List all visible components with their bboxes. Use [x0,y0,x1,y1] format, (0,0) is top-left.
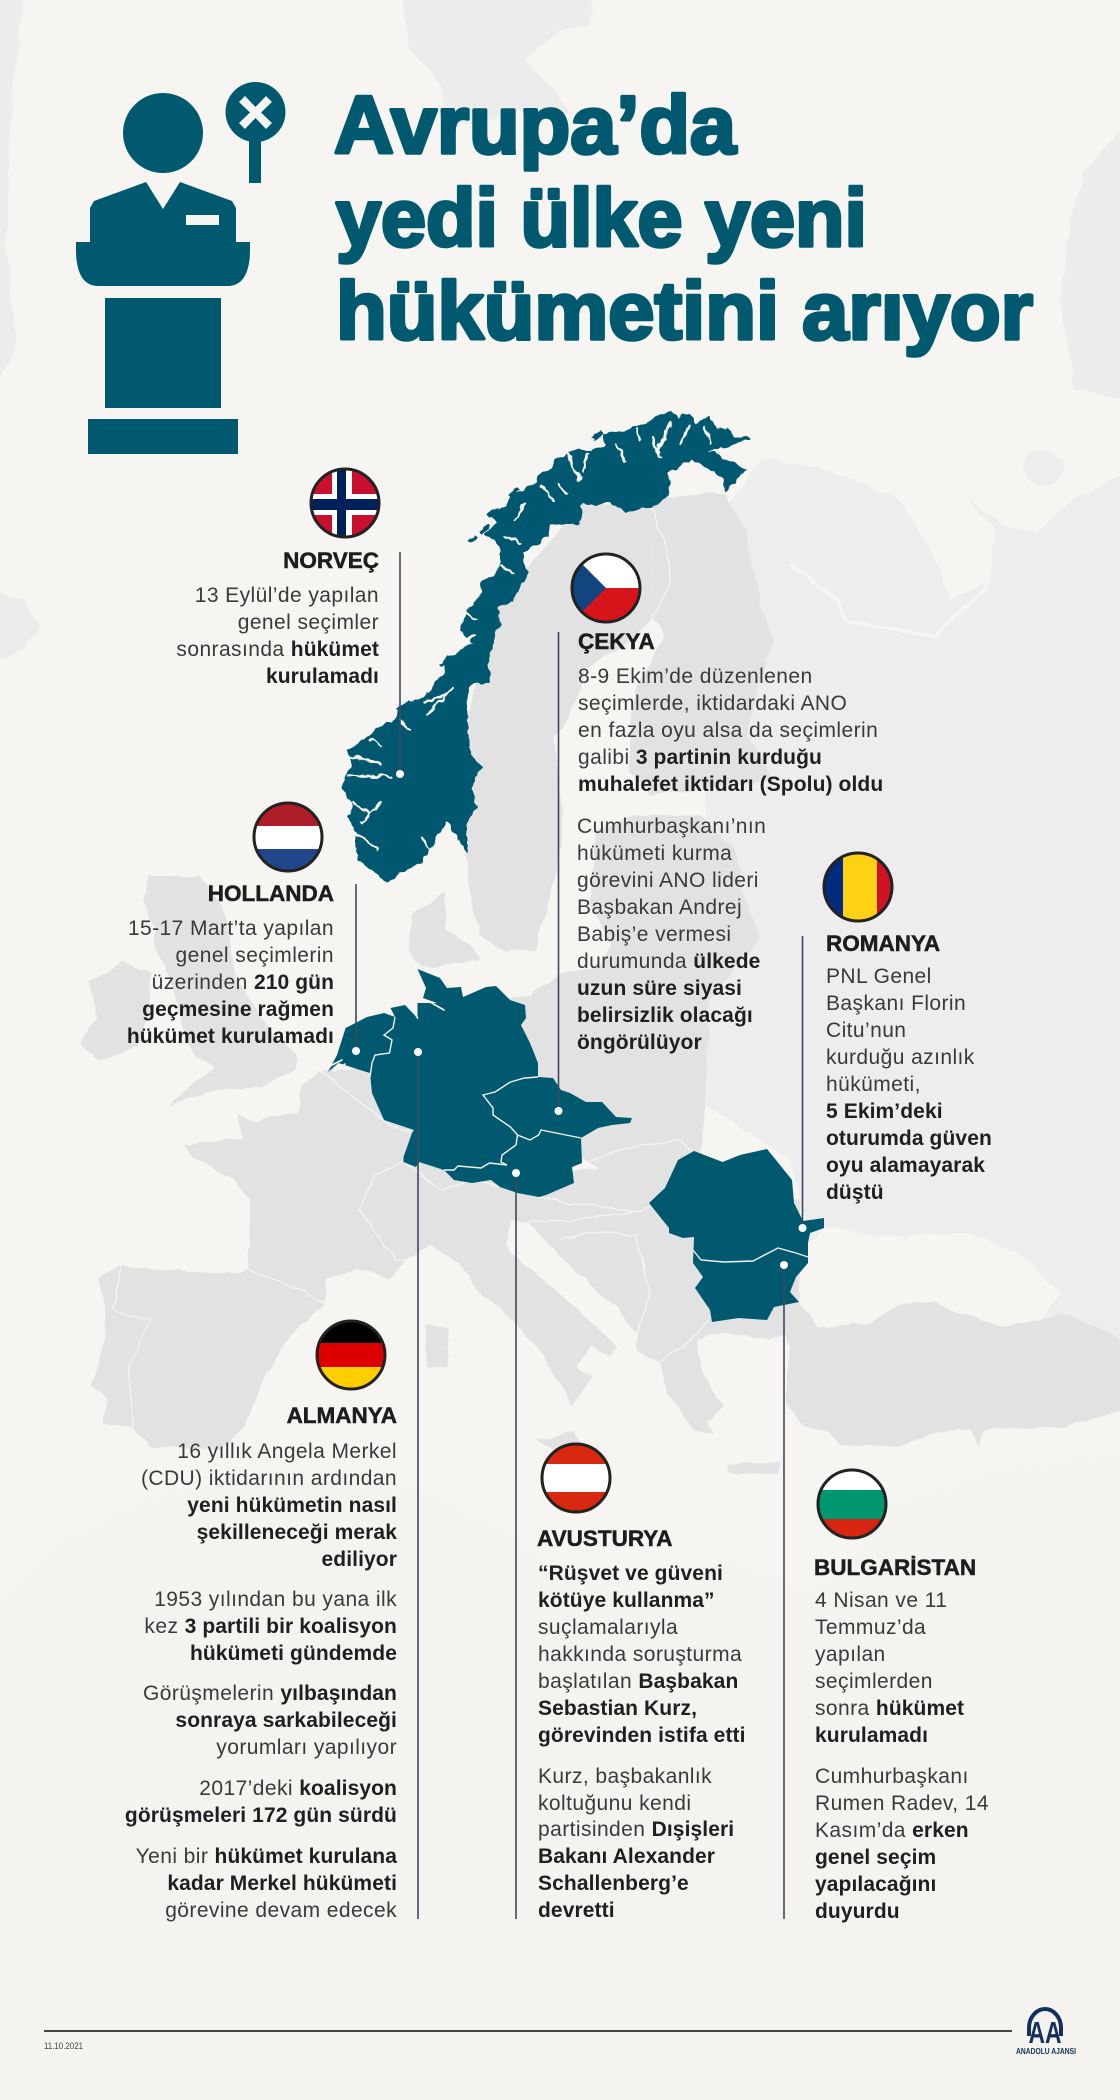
text: düştü [826,1181,884,1204]
text: oturumda güven [826,1127,992,1150]
text: belirsizlik olacağı [577,1004,753,1027]
text: 5 Ekim’deki [826,1100,943,1123]
heading: HOLLANDA [208,881,334,906]
text: yeni hükümetin nasıl [187,1494,397,1517]
text: seçimlerde, iktidardaki ANO [578,692,847,715]
panel: Netherlands [127,803,334,1048]
logo: Anadolu Ajansı: AA [1028,2015,1062,2050]
Arctic island [1023,450,1063,486]
text: Sebastian Kurz, [538,1697,697,1720]
text: hakkında soruşturma [538,1643,742,1666]
panel: Austria [536,1440,746,1922]
text: 1953 yılından bu yana ilk [154,1588,397,1611]
panel: Romania [820,850,992,1204]
text: koltuğunu kendi [538,1792,691,1815]
panel: Czechia [566,548,883,1054]
title: Avrupa’da [334,80,737,171]
torso and lectern top [76,182,250,286]
date: 11.10.2021 [44,2041,83,2051]
text: ediliyor [322,1548,397,1571]
Norway fjords [350,423,712,855]
text: “Rüşvet ve güveni [538,1562,723,1585]
text: kötüye kullanma” [538,1589,715,1612]
pedestal [105,298,221,408]
Czechia leader [554,632,562,1115]
text: sonraya sarkabileceği [175,1709,397,1732]
text: Rumen Radev, 14 [815,1792,989,1815]
flag: Bulgaria [816,1468,888,1540]
text: kez 3 partili bir koalisyon [144,1615,397,1638]
title [334,80,1033,357]
text: Kasım’da erken [815,1819,969,1842]
text: suçlamalarıyla [538,1616,678,1639]
Netherlands leader [352,884,360,1055]
text: 4 Nisan ve 11 [815,1589,947,1612]
flag: Romania [822,852,894,922]
text: kurulamadı [266,665,379,688]
panel: Germany [125,1320,397,1922]
text: öngörülüyor [577,1031,702,1054]
heading: BULGARİSTAN [814,1555,976,1580]
Crimea [880,1190,960,1238]
Black Sea [803,1227,1060,1327]
heading: ALMANYA [287,1403,397,1428]
Finland [630,493,774,795]
Ireland [80,961,150,1061]
text: hükümet kurulamadı [127,1025,334,1048]
panel: Bulgaria [812,1466,989,1923]
Bulgaria leader [780,1261,788,1919]
head [123,93,203,173]
text: başlatılan Başbakan [538,1670,738,1693]
heading: ÇEKYA [578,629,655,654]
text: Citu’nun [826,1019,906,1042]
map: highlighted countries [328,411,824,1322]
heading: ROMANYA [826,931,940,956]
text: sonra hükümet [815,1697,964,1720]
text: görüşmeleri 172 gün sürdü [125,1804,397,1827]
Great Britain [143,876,296,1106]
text: kurulamadı [815,1724,928,1747]
text: Temmuz’da [815,1616,926,1639]
faint Africa and Middle East landmass [0,1450,1120,2100]
Baltics, Poland and central Europe [500,815,760,1180]
Mediterranean islands [425,1187,780,1476]
Turkey [785,1302,1120,1448]
title: yedi ülke yeni [336,173,867,264]
text: genel seçim [815,1846,936,1869]
text: 13 Eylül’de yapılan [195,584,379,607]
Germany leader [414,1048,422,1919]
panel: Norway [176,465,385,688]
text: Görüşmelerin yılbaşından [143,1682,397,1705]
logo: Anadolu Ajansı: ANADOLU AJANSI [1016,2047,1076,2056]
text: (CDU) iktidarının ardından [141,1467,397,1490]
text: görevinden istifa etti [538,1724,746,1747]
base [88,419,238,454]
text: 15-17 Mart’ta yapılan [128,917,334,940]
text: hükümeti gündemde [190,1642,397,1665]
Austria leader [512,1169,520,1919]
text: 8-9 Ekim’de düzenlenen [578,665,813,688]
text: durumunda ülkede [577,950,760,973]
logo: Anadolu Ajansı [1016,2009,1076,2056]
flag: Austria [540,1442,612,1514]
Romania leader [798,936,806,1232]
White Sea [789,491,992,636]
flag: Netherlands [248,803,328,872]
text: Cumhurbaşkanı [815,1765,969,1788]
text: görevine devam edecek [165,1899,397,1922]
text: devretti [538,1899,615,1922]
text: şekilleneceği merak [197,1521,397,1544]
flag: Germany [316,1320,386,1390]
text: 2017’deki koalisyon [199,1777,397,1800]
text: seçimlerden [815,1670,933,1693]
Sweden [462,503,653,950]
Netherlands, Germany, Czechia, Austria [328,969,632,1197]
Iceland [0,590,40,662]
text: Schallenberg’e [538,1872,689,1895]
text: üzerinden 210 gün [152,971,334,994]
Norway leader [396,552,404,778]
text: yapılan [815,1643,886,1666]
text: 16 yıllık Angela Merkel [177,1440,397,1463]
Denmark [410,891,480,968]
text: yorumları yapılıyor [216,1736,397,1759]
text: muhalefet iktidarı (Spolu) oldu [578,773,883,796]
heading: NORVEÇ [283,548,379,573]
France, Iberia, Italy [91,1060,617,1450]
flag: Norway [310,468,380,538]
text: duyurdu [815,1900,900,1923]
text: Başkanı Florin [826,992,966,1015]
text: Cumhurbaşkanı’nın [577,815,766,838]
text: hükümeti kurma [577,842,732,865]
text: uzun süre siyasi [577,977,742,1000]
Balkans [528,1170,819,1433]
text: genel seçimlerin [176,944,334,967]
text: kurduğu azınlık [826,1046,975,1069]
text: görevini ANO lideri [577,869,759,892]
text: oyu alamayarak [826,1154,985,1177]
text: en fazla oyu alsa da seçimlerin [578,719,878,742]
text: genel seçimler [238,611,379,634]
text: geçmesine rağmen [142,998,334,1021]
text: Başbakan Andrej [577,896,742,919]
text: Yeni bir hükümet kurulana [136,1845,397,1868]
internal borders [115,507,710,1425]
text: PNL Genel [826,965,932,988]
title: hükümetini arıyor [336,266,1033,357]
heading: AVUSTURYA [537,1526,672,1551]
leader lines with dots [352,552,806,1919]
text: Kurz, başbakanlık [538,1765,712,1788]
text: kadar Merkel hükümeti [167,1872,397,1895]
icon: politician at lectern with X sign [76,82,286,454]
text: hükümeti, [826,1073,921,1096]
Russia, Ukraine and Belarus [700,458,1120,1350]
Romania-Bulgaria border [693,1248,808,1262]
text: sonrasında hükümet [176,638,379,661]
Romania and Bulgaria [649,1149,824,1322]
text: galibi 3 partinin kurduğu [578,746,822,769]
sign [226,82,286,183]
text: Bakanı Alexander [538,1845,715,1868]
text: partisinden Dışişleri [538,1818,734,1841]
Norway islands [396,430,604,711]
text: yapılacağını [815,1873,936,1896]
coastal inlets [330,1002,444,1071]
borders between the highlighted countries [370,1017,581,1170]
flag: Czechia [570,552,642,624]
text: Babiş’e vermesi [577,923,732,946]
Norway [343,411,752,882]
footer rule [44,2030,1012,2032]
Arctic land at the top [400,0,595,125]
